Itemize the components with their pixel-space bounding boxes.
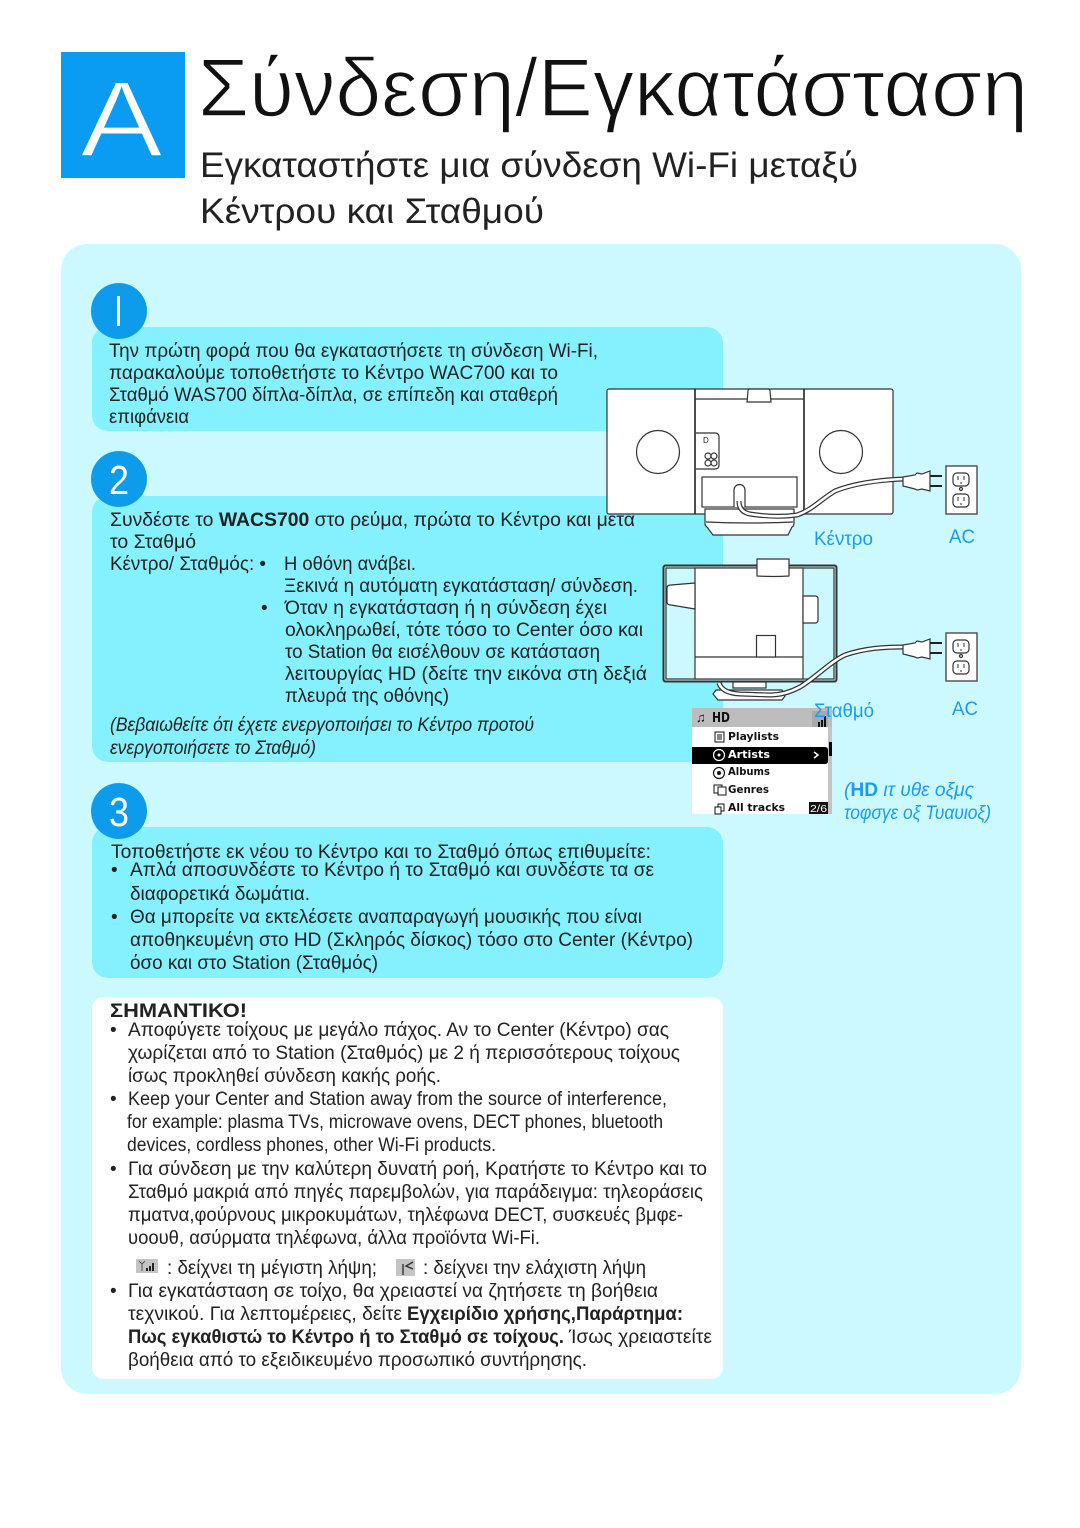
step 2 text: Κέντρο/ Σταθμός: •	[110, 554, 266, 575]
step 2 text: το Σταθμό	[110, 532, 196, 553]
note: interference: devices, cordless phones, other Wi-Fi products.	[127, 1135, 496, 1156]
note: best flow: Για σύνδεση με την καλύτερη δυνατή ροή, Κρατήστε το Κέντρο και το	[128, 1159, 707, 1180]
subtitle: Κέντρου και Σταθμού	[200, 192, 544, 231]
minimum signal label: : δείχνει την ελάχιστη λήψη	[423, 1258, 646, 1279]
menu item: Albums: Albums	[728, 765, 770, 778]
HD menu screenshot: ♫	[696, 710, 706, 725]
menu item: Artists: Artists	[728, 748, 770, 761]
track counter: 2/6	[810, 804, 828, 815]
step 1 text: Την πρώτη φορά που θα εγκαταστήσετε τη σύνδεση Wi-Fi,	[109, 341, 598, 362]
number badge 2	[91, 451, 147, 507]
step 3 text: όσο και στο Station (Σταθμός)	[130, 953, 378, 974]
step 1 text: παρακαλούμε τοποθετήστε το Κέντρο WAC700 και το	[109, 363, 558, 384]
step 2 text: λειτουργίας HD (δείτε την εικόνα στη δεξιά	[285, 664, 647, 685]
step 3 text: •	[111, 907, 118, 928]
note: best flow	[110, 1159, 707, 1249]
panel: step 2	[92, 496, 723, 762]
caption: HD screen: (HD ιτ υθε οξμς	[844, 780, 975, 801]
step 3 text	[111, 842, 693, 974]
note: wall mounting: Πως εγκαθιστώ το Κέντρο ή το Σταθμό σε τοίχους.	[128, 1327, 564, 1348]
title: Σύνδεση/Εγκατάσταση	[198, 41, 1028, 134]
note: interference	[110, 1089, 667, 1156]
panel: step 1	[92, 327, 723, 431]
illustration: centre unit with cord and outlet: D	[703, 436, 709, 445]
note: thick walls	[110, 1020, 680, 1087]
step 3 text: Θα μπορείτε να εκτελέσετε αναπαραγωγή μουσικής που είναι	[130, 907, 642, 928]
badge: letter A	[61, 52, 185, 179]
note: interference: •	[110, 1089, 117, 1110]
icon: maximum signal	[136, 1259, 158, 1273]
caption: HD screen: τοφσγε οξ Τυαυιοξ)	[844, 803, 991, 824]
menu item: Playlists: Playlists	[728, 730, 779, 743]
step 1 text: επιφάνεια	[109, 407, 189, 428]
note: best flow: πματνα,φούρνους μικροκυμάτων, τηλέφωνα DECT, συσκευές βμφε-	[128, 1205, 683, 1226]
note: thick walls: Αποφύγετε τοίχους με μεγάλο πάχος. Αν το Center (Κέντρο) σας	[128, 1020, 669, 1041]
step 3 text: Απλά αποσυνδέστε το Κέντρο ή το Σταθμό και συνδέστε τα σε	[130, 860, 655, 881]
note: thick walls: ίσως προκληθεί σύνδεση κακής ροής.	[128, 1066, 441, 1087]
number badge 1	[91, 283, 147, 339]
caption: HD screen	[844, 780, 991, 824]
illustration: centre unit with cord and outlet	[607, 389, 977, 535]
note: wall mounting: Εγχειρίδιο χρήσης,Παράρτημα:	[407, 1304, 683, 1325]
step 1 text	[109, 341, 598, 428]
step 2 text: το Station θα εισέλθουν σε κατάσταση	[285, 642, 600, 663]
number badge 3: 3	[109, 789, 129, 835]
step 2 text: Συνδέστε το WACS700 στο ρεύμα, πρώτα το Κέντρο και μετά	[110, 510, 635, 531]
number badge 3	[91, 783, 147, 839]
important heading: ΣΗΜΑΝΤΙΚΟ!	[110, 1001, 247, 1022]
note: wall mounting	[110, 1281, 713, 1371]
note: thick walls: χωρίζεται από το Station (Σταθμός) με 2 ή περισσότερους τοίχους	[128, 1043, 680, 1064]
menu item: Genres: Genres	[728, 783, 769, 796]
number badge 2: 2	[109, 457, 129, 503]
subtitle	[200, 146, 858, 231]
note: best flow: Σταθμό μακριά από πηγές παρεμβολών, για παράδειγμα: τηλεοράσεις	[128, 1182, 703, 1203]
step 2 text	[110, 510, 647, 707]
main panel background	[61, 244, 1021, 1394]
note: wall mounting: βοήθεια από το εξειδικευμένο προσωπικό συντήρησης.	[128, 1350, 587, 1371]
step 2 text: •	[261, 598, 268, 619]
note: best flow: •	[110, 1159, 117, 1180]
label: AC outlet, station: AC	[952, 699, 978, 720]
icon: minimum signal	[396, 1259, 415, 1276]
panel: important notes	[92, 997, 723, 1379]
panel: step 3	[92, 827, 723, 978]
note: wall mounting: τεχνικού. Για λεπτομέρειες, δείτε	[128, 1304, 403, 1325]
note: interference: for example: plasma TVs, microwave ovens, DECT phones, bluetooth	[127, 1112, 663, 1133]
step 2 text: Ξεκινά η αυτόματη εγκατάσταση/ σύνδεση.	[284, 576, 638, 597]
menu item: All tracks: All tracks	[728, 801, 785, 814]
step 2 text: ολοκληρωθεί, τότε τόσο το Center όσο και	[285, 620, 643, 641]
step 2 italic note	[110, 715, 534, 759]
step 1 text: Σταθμό WAS700 δίπλα-δίπλα, σε επίπεδη και σταθερή	[109, 385, 558, 406]
label: AC outlet, centre: AC	[949, 527, 975, 548]
note: thick walls: •	[110, 1020, 117, 1041]
step 2 text: Η οθόνη ανάβει.	[284, 554, 416, 575]
badge: letter A: A	[80, 58, 163, 179]
HD menu screenshot	[692, 708, 832, 815]
HD menu screenshot: HD	[712, 711, 730, 726]
step 2 text: Όταν η εγκατάσταση ή η σύνδεση έχει	[284, 598, 607, 619]
note: wall mounting: Για εγκατάσταση σε τοίχο, θα χρειαστεί να ζητήσετε τη βοήθεια	[128, 1281, 658, 1302]
label: centre: Κέντρο	[814, 529, 873, 550]
step 2 text: πλευρά της οθόνης)	[285, 686, 449, 707]
maximum signal label: : δείχνει τη μέγιστη λήψη;	[167, 1258, 377, 1279]
note: best flow: υοουθ, ασύρματα τηλέφωνα, άλλα προϊόντα Wi-Fi.	[128, 1228, 540, 1249]
subtitle: Εγκαταστήστε μια σύνδεση Wi-Fi μεταξύ	[200, 146, 858, 185]
label: station: Σταθμό	[814, 701, 874, 722]
step 2 italic note: ενεργοποιήσετε το Σταθμό)	[110, 738, 316, 759]
step 3 text: Τοποθετήστε εκ νέου το Κέντρο και το Σταθμό όπως επιθυμείτε:	[111, 842, 651, 863]
step 3 text: αποθηκευμένη στο HD (Σκληρός δίσκος) τόσο στο Center (Κέντρο)	[130, 930, 693, 951]
note: interference: Keep your Center and Station away from the source of interference,	[128, 1089, 667, 1110]
step 3 text: •	[111, 860, 118, 881]
step 2 italic note: (Βεβαιωθείτε ότι έχετε ενεργοποιήσει το Κέντρο προτού	[110, 715, 534, 736]
illustration: station unit with cord and outlet	[664, 559, 977, 700]
note: wall mounting: •	[110, 1281, 117, 1302]
step 3 text: διαφορετικά δωμάτια.	[130, 884, 310, 905]
note: wall mounting: Ίσως χρειαστείτε	[568, 1327, 713, 1348]
